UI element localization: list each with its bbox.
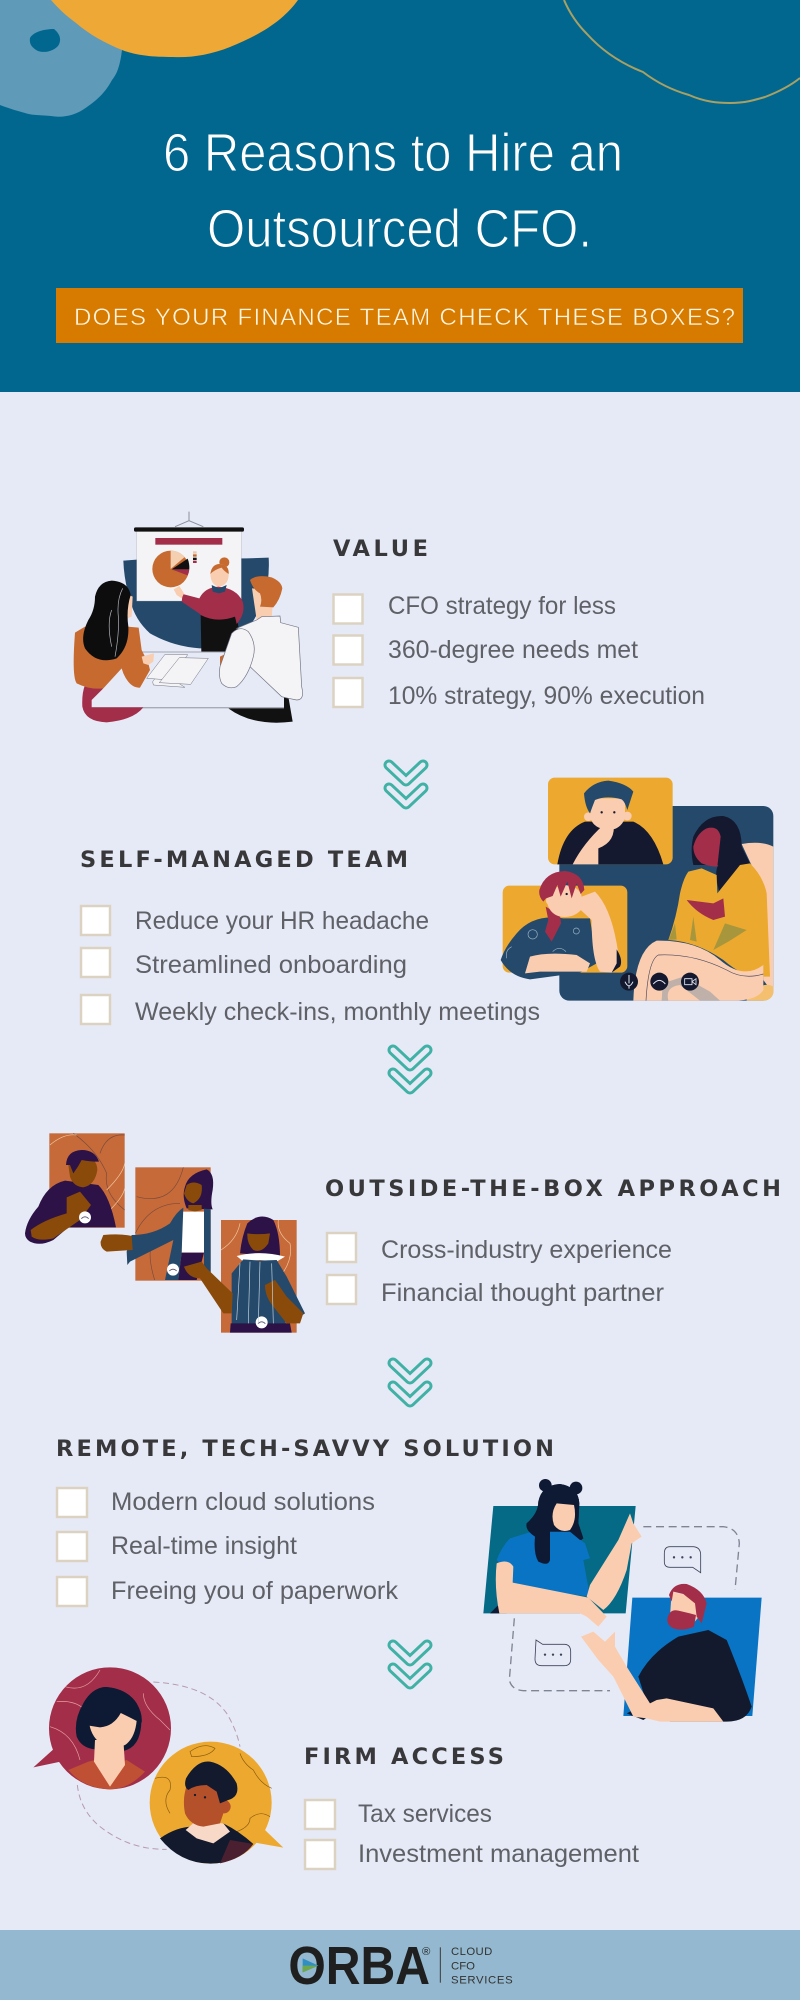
title <box>163 123 623 259</box>
woman with buns <box>490 1479 642 1627</box>
woman with red braid <box>501 871 621 979</box>
arrow: chevrons 2 <box>393 1050 427 1089</box>
man with hand on chest <box>25 1150 116 1244</box>
checkbox <box>305 1800 335 1829</box>
logo <box>288 1937 513 1996</box>
section: outside-the-box approach <box>325 1176 781 1307</box>
heading: REMOTE, TECH-SAVVY SOLUTION <box>56 1436 554 1462</box>
subtitle banner <box>56 288 743 343</box>
section: remote, tech-savvy solution <box>56 1436 554 1606</box>
heading: OUTSIDE-THE-BOX APPROACH <box>325 1176 781 1202</box>
item: Cross-industry experience <box>381 1236 672 1264</box>
title: 6 Reasons to Hire an <box>163 123 623 183</box>
presenter <box>174 557 244 652</box>
arrow: chevrons 1 <box>389 765 423 804</box>
item: Weekly check-ins, monthly meetings <box>135 998 540 1026</box>
logo: ® <box>422 1946 431 1958</box>
logo: SERVICES <box>451 1975 513 1987</box>
item: Reduce your HR headache <box>135 907 429 935</box>
call buttons <box>620 973 699 991</box>
checkbox <box>57 1577 87 1606</box>
checkbox <box>57 1532 87 1561</box>
checkbox <box>81 948 110 977</box>
checkbox <box>327 1275 356 1304</box>
checkbox <box>305 1840 335 1869</box>
man on call <box>557 781 663 864</box>
speech bubbles <box>535 1547 701 1666</box>
item: 10% strategy, 90% execution <box>388 682 705 710</box>
heading: FIRM ACCESS <box>304 1744 504 1770</box>
table and papers <box>92 652 284 708</box>
logo: CFO <box>451 1960 475 1972</box>
illustration: remote chat <box>483 1479 762 1722</box>
man in yellow circle <box>150 1742 283 1864</box>
section: firm access <box>304 1744 639 1869</box>
subtitle banner: DOES YOUR FINANCE TEAM CHECK THESE BOXES? <box>74 304 735 331</box>
illustration: video call team <box>501 778 773 1001</box>
logo: ORBA <box>288 1937 430 1996</box>
arrow: chevrons 3 <box>393 1363 427 1402</box>
heading: SELF-MANAGED TEAM <box>80 847 408 873</box>
illustration: presentation meeting <box>74 512 303 723</box>
item: CFO strategy for less <box>388 592 616 620</box>
illustration: three colleagues <box>25 1133 305 1333</box>
woman with long hair <box>74 581 154 722</box>
item: Financial thought partner <box>381 1279 664 1307</box>
woman with open jacket <box>101 1169 213 1280</box>
checkbox <box>327 1233 356 1262</box>
illustration: client advisors <box>33 1667 283 1864</box>
checkbox <box>57 1488 87 1517</box>
woman with bangs <box>184 1217 305 1333</box>
man in white shirt <box>219 576 303 700</box>
item: Tax services <box>358 1800 492 1828</box>
woman in yellow sweater <box>633 816 770 1001</box>
checkbox <box>334 636 362 664</box>
arrow: chevrons 4 <box>393 1645 427 1684</box>
item: 360-degree needs met <box>388 636 638 664</box>
title: Outsourced CFO. <box>207 199 592 259</box>
checkbox <box>81 995 110 1024</box>
checkbox <box>334 594 362 624</box>
panel: header <box>0 0 800 392</box>
bearded man <box>581 1584 752 1722</box>
item: Investment management <box>358 1840 639 1868</box>
item: Real-time insight <box>111 1532 297 1560</box>
checkbox <box>334 678 362 707</box>
woman in red circle <box>33 1667 171 1789</box>
item: Streamlined onboarding <box>135 951 407 979</box>
section: value <box>333 536 705 710</box>
checkbox <box>81 906 110 935</box>
item: Freeing you of paperwork <box>111 1577 399 1605</box>
logo: CLOUD <box>451 1946 492 1958</box>
heading: VALUE <box>333 536 428 562</box>
section: self-managed team <box>80 847 540 1026</box>
item: Modern cloud solutions <box>111 1488 375 1516</box>
footer with logo <box>0 1930 800 2000</box>
